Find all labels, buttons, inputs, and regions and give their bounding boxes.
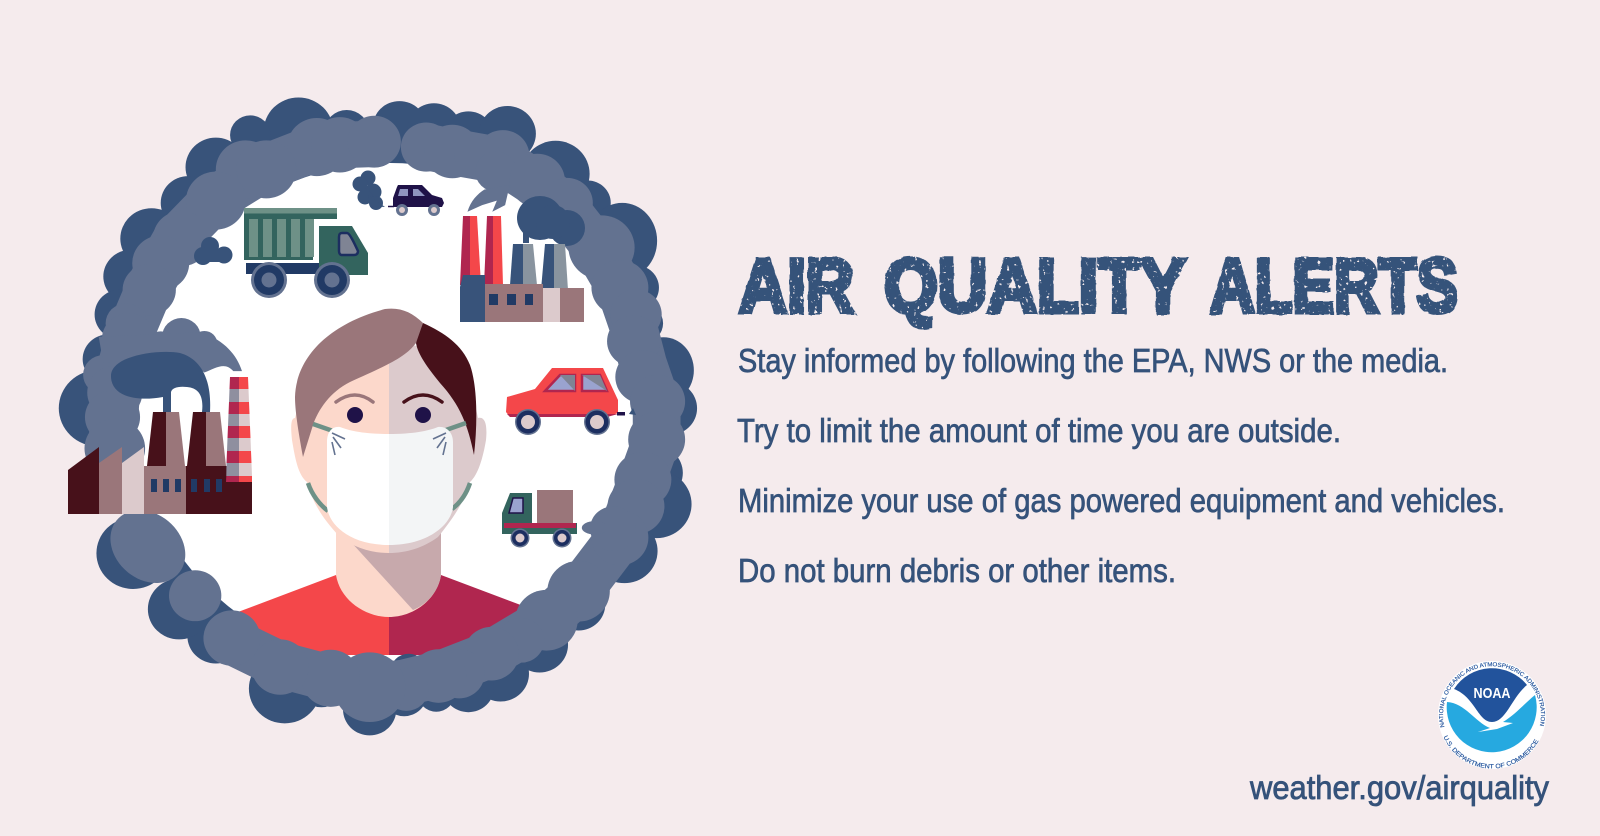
title: ALERTS <box>1210 244 1458 329</box>
NOAA logo: NOAA <box>1474 685 1511 702</box>
neck <box>336 530 441 617</box>
exhaust smoke from small car <box>352 170 385 210</box>
tip 4: Do not burn debris or other items. <box>738 552 1176 589</box>
icon: small dark car <box>388 185 444 216</box>
smoke from dump truck <box>194 237 232 265</box>
mask straps <box>308 423 470 511</box>
NOAA logo <box>1438 661 1546 769</box>
title: AIR <box>739 244 854 329</box>
smoke ring: light inner puffs <box>83 116 685 722</box>
hair <box>295 309 476 457</box>
tip 3: Minimize your use of gas powered equipment and vehicles. <box>738 482 1505 519</box>
NOAA logo: U.S. DEPARTMENT OF COMMERCE <box>1444 735 1538 768</box>
face mask <box>327 427 453 545</box>
icon: small delivery truck <box>502 490 577 548</box>
eyebrows <box>336 395 442 402</box>
dark smoke from left factory <box>111 352 210 412</box>
shirt <box>238 575 526 655</box>
striped chimney <box>226 377 252 482</box>
dark smoke from right factory <box>517 196 585 246</box>
person wearing a face mask <box>238 309 526 655</box>
title: QUALITY <box>884 244 1186 329</box>
body text: safety tips <box>737 342 1505 589</box>
icon: dump truck <box>244 208 368 298</box>
illustration: person surrounded by smoke and pollution sources <box>59 97 697 735</box>
smoke ring: dark puffs over the shirt <box>257 640 501 689</box>
icon: red car <box>506 368 636 435</box>
tip 2: Try to limit the amount of time you are outside. <box>737 412 1341 449</box>
white interior of the ring <box>135 163 645 663</box>
icon: left factory <box>68 377 252 514</box>
NOAA logo: NATIONAL OCEANIC AND ATMOSPHERIC ADMINISTRATION <box>1438 662 1546 728</box>
tip 1: Stay informed by following the EPA, NWS or the media. <box>738 342 1448 379</box>
face <box>291 340 486 553</box>
smoke ring: dark outer puffs <box>59 97 697 735</box>
website url: weather.gov/airquality <box>1249 769 1549 806</box>
eyes <box>347 407 431 423</box>
icon: right factory <box>460 216 584 322</box>
